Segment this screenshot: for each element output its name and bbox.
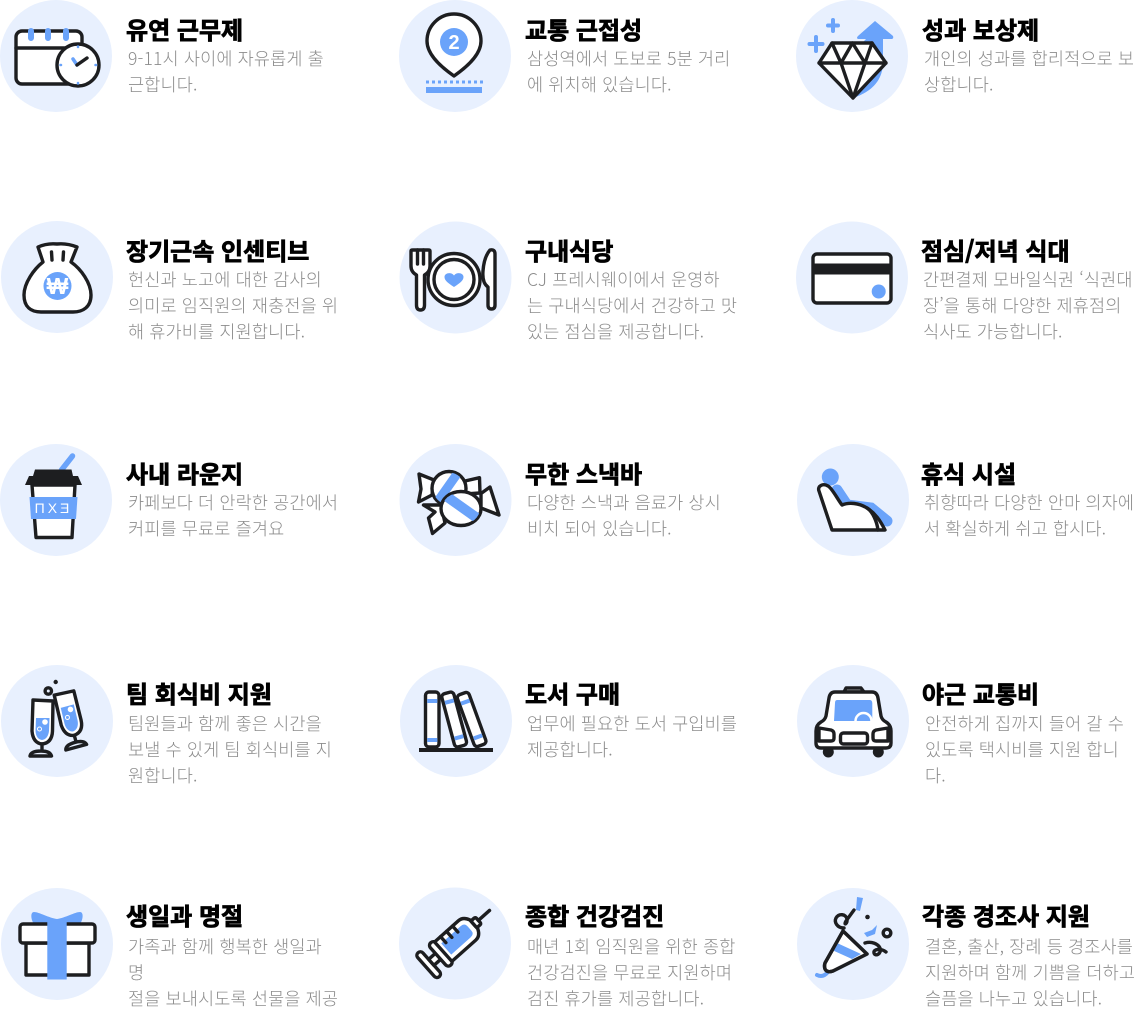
panel: birthday and holidays (1, 888, 338, 1011)
icon: location pin: 2 (448, 32, 460, 54)
text block (527, 46, 730, 97)
heading: 무한 스낵바 (525, 455, 642, 490)
text block: 9-11시 사이에 자유롭게 출 (128, 46, 324, 71)
heading: 사내 라운지 (126, 455, 243, 490)
panel: night transport (797, 665, 1124, 788)
text block: 카페보다 더 안락한 공간에서 (128, 490, 338, 515)
heading: 종합 건강검진 (525, 897, 664, 932)
text block: 헌신과 노고에 대한 감사의 (128, 267, 322, 292)
text block: 팀원들과 함께 좋은 시간을 (128, 711, 322, 736)
icon: money bag (1, 221, 113, 333)
panel: flexible work hours (0, 0, 324, 112)
icon: credit card (796, 222, 908, 334)
text block: 식사도 가능합니다. (923, 319, 1063, 344)
icon: money bag: ₩ (47, 273, 69, 299)
heading: 생일과 명절 (126, 897, 243, 932)
text block (925, 934, 1135, 1012)
icon: champagne glasses (1, 665, 113, 777)
heading: 팀 회식비 지원 (126, 675, 272, 710)
icon: coffee cup (0, 444, 112, 556)
text block: 제공합니다. (527, 737, 613, 762)
heading: 점심/저녁 식대 (921, 232, 1070, 267)
text block (527, 934, 735, 1011)
panel: lounge (0, 444, 338, 556)
text block: 원합니다. (128, 763, 198, 788)
heading: 야근 교통비 (922, 675, 1039, 710)
icon: coffee cup: ПXƎ (35, 500, 72, 516)
text block: 의미로 임직원의 재충전을 위 (128, 293, 338, 318)
text block: 장’을 통해 다양한 제휴점의 (923, 293, 1121, 318)
icon: location pin (399, 0, 511, 112)
text block: 지원하며 함께 기쁨을 더하고 (925, 960, 1135, 985)
panel: rest area (797, 444, 1134, 556)
icon: diamond with arrow (796, 0, 908, 112)
text block: 서 확실하게 쉬고 합시다. (924, 516, 1106, 541)
text block (128, 490, 338, 541)
text block: 해 휴가비를 지원합니다. (128, 319, 305, 344)
text block (128, 267, 338, 344)
text block: 개인의 성과를 합리적으로 보 (924, 46, 1134, 71)
heading: 교통 근접성 (525, 11, 642, 46)
panel: health checkup (399, 888, 735, 1011)
text block: 절을 보내시도록 선물을 제공 (128, 986, 338, 1011)
text block (924, 46, 1134, 97)
panel: team dinner (1, 665, 332, 788)
panel: snack bar (400, 444, 721, 556)
heading: 유연 근무제 (126, 11, 243, 46)
heading: 구내식당 (525, 232, 613, 267)
icon: syringe (399, 888, 511, 1000)
text block: 비치 되어 있습니다. (527, 516, 672, 541)
text block (128, 711, 332, 788)
icon: candies (400, 444, 512, 556)
text block: 취향따라 다양한 안마 의자에 (924, 490, 1134, 515)
text block (128, 934, 338, 1011)
text block (527, 711, 737, 762)
heading: 각종 경조사 지원 (922, 897, 1090, 932)
text block: 슬픔을 나누고 있습니다. (925, 986, 1102, 1011)
icon: gift box (1, 888, 113, 1000)
text block: 가족과 함께 행복한 생일과 (128, 934, 322, 959)
text block (925, 711, 1124, 788)
text block: 다양한 스낵과 음료가 상시 (527, 490, 721, 515)
panel: long service incentive (1, 221, 338, 344)
text block (924, 490, 1134, 541)
panel: book purchase (400, 665, 737, 777)
text block: 매년 1회 임직원을 위한 종합 (527, 934, 735, 959)
text block (527, 267, 737, 344)
text block: 결혼, 출산, 장례 등 경조사를 (925, 934, 1133, 959)
text block: 간편결제 모바일식권 ‘식권대 (923, 267, 1133, 292)
text block: 커피를 무료로 즐겨요 (128, 516, 284, 541)
panel: cafeteria (400, 222, 737, 344)
icon: taxi (797, 665, 909, 777)
heading: 성과 보상제 (922, 11, 1039, 46)
icon: massage chair (797, 444, 909, 556)
heading: 도서 구매 (525, 675, 620, 710)
text block: 검진 휴가를 제공합니다. (527, 986, 704, 1011)
text block: 근합니다. (128, 72, 198, 97)
icon: calendar and clock (0, 0, 112, 112)
text block: 다. (925, 763, 946, 788)
panel: meal allowance (796, 222, 1133, 344)
heading: 휴식 시설 (921, 455, 1016, 490)
panel: performance reward (796, 0, 1134, 112)
text block (923, 267, 1133, 344)
text block: 삼성역에서 도보로 5분 거리 (527, 46, 730, 71)
panel: family events (797, 888, 1136, 1013)
icon: books on shelf (400, 665, 512, 777)
text block: 는 구내식당에서 건강하고 맛 (527, 293, 737, 318)
text block: 명 (128, 960, 144, 985)
text block (128, 46, 324, 97)
icon: plate, fork and knife (400, 222, 512, 334)
heading: 장기근속 인센티브 (126, 232, 309, 267)
text block: 있도록 택시비를 지원 합니 (925, 737, 1119, 762)
text block: 안전하게 집까지 들어 갈 수 (925, 711, 1124, 736)
text block: 보낼 수 있게 팀 회식비를 지 (128, 737, 332, 762)
text block: 에 위치해 있습니다. (527, 72, 672, 97)
text block: CJ 프레시웨이에서 운영하 (527, 267, 720, 292)
text block: 있는 점심을 제공합니다. (527, 319, 704, 344)
text block: 건강검진을 무료로 지원하며 (527, 960, 732, 985)
panel: transit access (399, 0, 730, 112)
text block: 상합니다. (924, 72, 994, 97)
icon: party popper (797, 888, 909, 1000)
text block (527, 490, 721, 541)
text block: 업무에 필요한 도서 구입비를 (527, 711, 737, 736)
